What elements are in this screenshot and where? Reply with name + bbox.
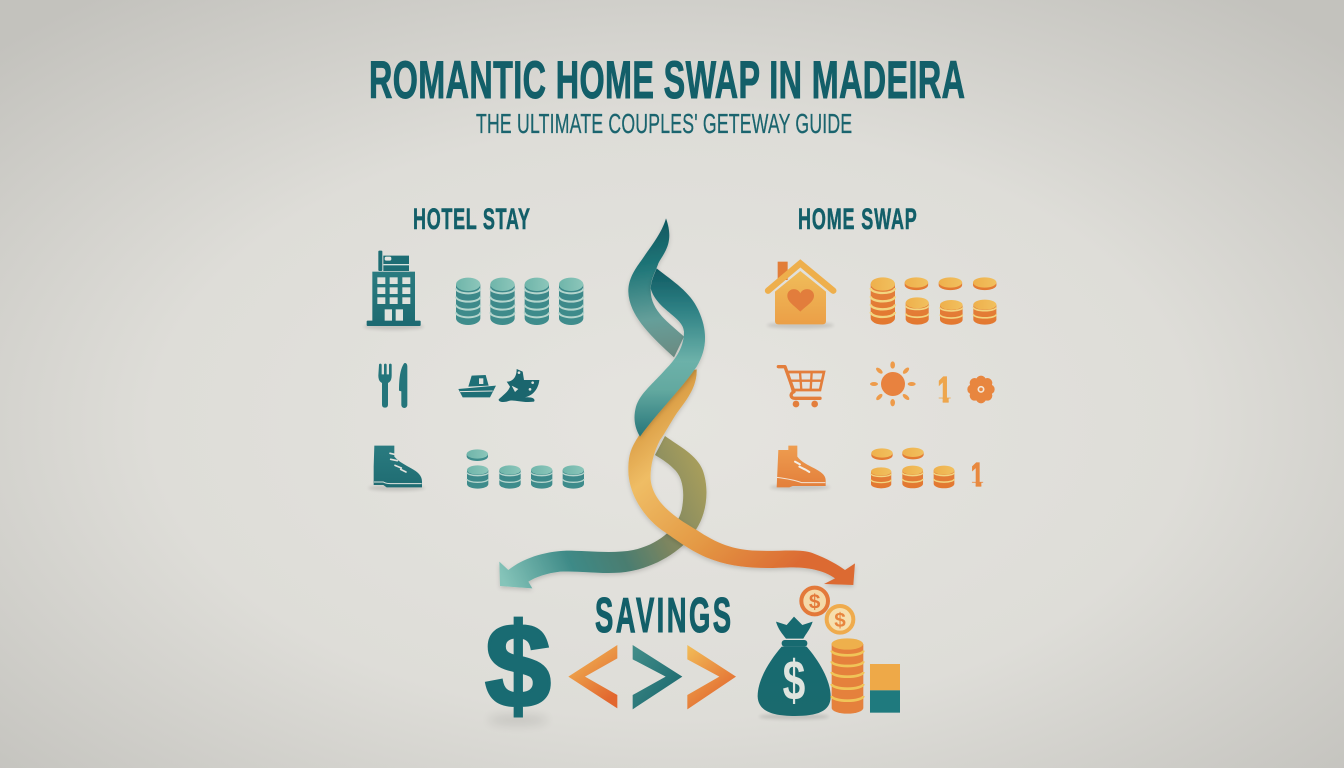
comparison chevrons and savings icons (568, 588, 900, 720)
icon: ship on waves (499, 369, 539, 402)
icon: orange walking boot (770, 446, 830, 490)
coin stacks: hotel cost (456, 278, 583, 325)
panel: hotel stay (364, 204, 584, 491)
ribbon: upper left teal strand (628, 218, 684, 357)
icon: dollar sign: $ (485, 599, 551, 733)
coin stacks: home swap lodging cost (871, 277, 996, 325)
icon: orange dollar coin: $ (809, 591, 821, 614)
icon: tall coin stack (831, 638, 863, 714)
coin stacks: home swap activities cost (871, 448, 954, 488)
panel: home swap (767, 204, 996, 494)
heading: home swap: HOME SWAP (798, 204, 917, 236)
subtitle: THE ULTIMATE COUPLES' GETEWAY GUIDE (476, 108, 852, 139)
twisted ribbon with two arrows (499, 218, 855, 588)
ribbon: olive strand ending in left arrow (499, 436, 706, 588)
chevron: orange left (568, 645, 617, 708)
icon: shopping cart (778, 367, 824, 407)
title: ROMANTIC HOME SWAP IN MADEIRA (369, 51, 965, 110)
row icons and coins: hotel stay (364, 251, 584, 491)
icon: money bag: $ (783, 650, 805, 713)
icon: boat (458, 375, 496, 397)
icon: money bag (758, 617, 831, 720)
heading: hotel stay: HOTEL STAY (413, 204, 530, 236)
icon: yellow dollar coin (827, 606, 853, 633)
icon: hotel building (364, 251, 424, 330)
icon: two-colour block (870, 664, 900, 713)
heading: savings: SAVINGS (595, 589, 731, 643)
number: 1: 1 (971, 457, 983, 494)
chevron: teal right (633, 645, 682, 709)
coin stacks: activities cost (467, 449, 584, 489)
panel: savings (485, 588, 900, 733)
number: 1: 1 (938, 369, 951, 410)
icon: sun (870, 361, 916, 406)
icon: house with heart (767, 262, 834, 329)
icon: flower (967, 376, 995, 403)
chevron: orange right (687, 645, 736, 709)
ribbon: teal strand crossing to centre (635, 268, 705, 437)
row icons and coins: home swap (767, 262, 996, 494)
icon: walking boot (368, 446, 425, 491)
icon: fork and knife (378, 363, 407, 408)
icon: orange dollar coin (801, 588, 828, 614)
ribbon: orange strand ending in right arrow (628, 369, 855, 585)
icon: yellow dollar coin: $ (834, 609, 846, 632)
